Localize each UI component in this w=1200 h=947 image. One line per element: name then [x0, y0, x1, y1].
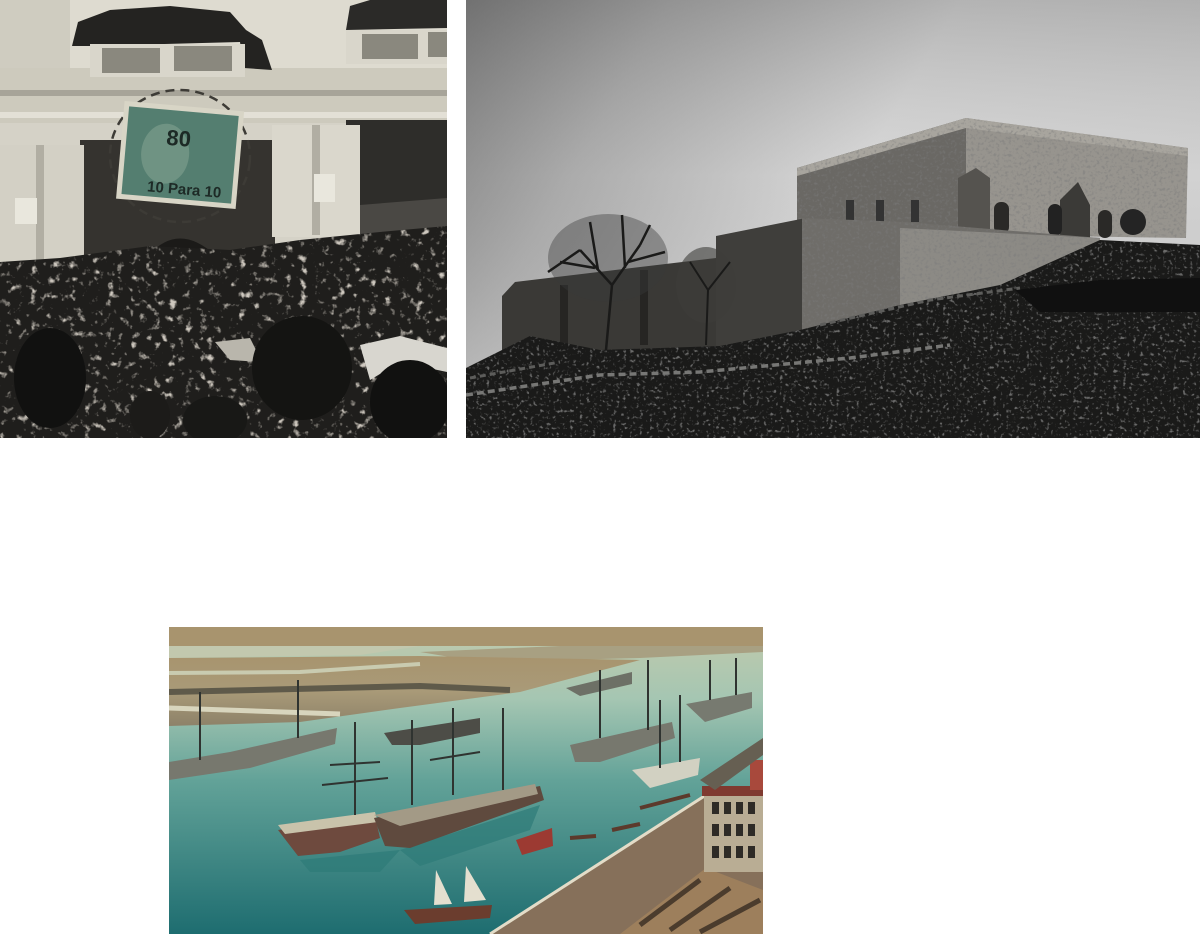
- dark hillside: [466, 230, 1200, 438]
- upper facade: [0, 0, 447, 123]
- postage stamp: 10 Para 10: [146, 178, 222, 202]
- sky: [466, 0, 1200, 368]
- photo: tinted harbour with steamships: [169, 627, 763, 934]
- water: [169, 640, 763, 934]
- quay and buildings: [490, 738, 763, 934]
- balcony railings: [90, 30, 447, 77]
- fortress upper building: [797, 118, 1188, 240]
- upper balcony crowds: [72, 0, 447, 70]
- lower crowd: [0, 226, 450, 444]
- photo: crowd below a balcony with a postage stamp: [0, 0, 450, 444]
- bare trees: [548, 214, 736, 350]
- far shore and sky band: [169, 627, 763, 726]
- photo: stone fortress on a hillside: [466, 0, 1200, 438]
- ships: [169, 658, 752, 924]
- postage stamp: [111, 88, 249, 209]
- fortress walls: [502, 218, 1100, 350]
- doorways and columns: [0, 120, 447, 265]
- postage stamp: 80: [165, 125, 192, 152]
